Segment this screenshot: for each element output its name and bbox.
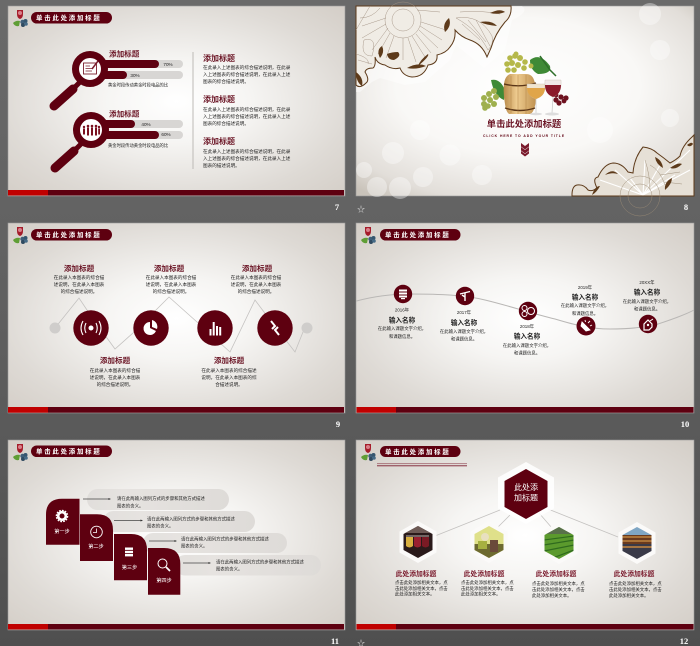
caption 1: 此处添加相关文本。 bbox=[395, 590, 435, 598]
lace ornament: top-left bbox=[356, 2, 524, 92]
node 2018: 在此输入课题文字介绍， bbox=[503, 342, 551, 349]
chevron icon bbox=[521, 143, 529, 156]
caption 3: 此处添加相关文本。 bbox=[532, 592, 572, 599]
node 2018: 2018年 bbox=[520, 323, 535, 330]
text block: bottom 2: 在此录入本图表的综合描述 bbox=[201, 367, 257, 374]
caption 4: 击此处添加相关文本，点击 bbox=[609, 586, 662, 593]
step 3 card: 第三步 bbox=[122, 563, 137, 571]
hexagon photo: green vineyard bbox=[544, 526, 574, 559]
node 20XX: 20XX年 bbox=[639, 279, 655, 286]
text block: top 2: 在此录入本图表的综合描 bbox=[146, 274, 197, 281]
text block: bottom 1: 述说明，在此录入本图表 bbox=[90, 374, 141, 381]
slide 9 header bbox=[13, 227, 112, 244]
wine barrel and grapes bbox=[481, 52, 569, 116]
caption 4 bbox=[609, 569, 662, 599]
page number 11: 11 bbox=[331, 636, 339, 646]
magnifier 2 with progress bars: 40% bbox=[141, 122, 151, 127]
text block: bottom 2: 合描述说明。 bbox=[215, 381, 243, 388]
node 2019: 输入名称 bbox=[572, 292, 599, 302]
slide 11: four steps bbox=[8, 440, 345, 646]
text block: top 2: 添加标题 bbox=[154, 263, 185, 273]
text block 1: 入上述图表的综合描述说明，在此录入上述 bbox=[203, 71, 291, 78]
text block: top 3: 述说明，在此录入本图表 bbox=[231, 281, 282, 288]
step row 4 text pill: 图表的含义。 bbox=[216, 566, 242, 572]
caption 2: 此处添加标题 bbox=[464, 569, 505, 578]
node 2017: 和课题信息。 bbox=[451, 336, 477, 342]
text block: bottom 2: 说明，在此录入本图表的综 bbox=[201, 374, 257, 381]
caption 2 bbox=[461, 569, 514, 598]
step row 2 text pill: 请在此两输入图列方式的步骤和其他方式描述 bbox=[147, 516, 235, 522]
circle icon: pie bbox=[133, 310, 169, 346]
step row 3 text pill: 请在此两输入图列方式的步骤和其他方式描述 bbox=[181, 536, 269, 542]
step 2 card bbox=[80, 514, 113, 561]
slide 10 header: 单击此处添加标题 bbox=[385, 230, 451, 239]
slide 7: magnifier statistics bbox=[8, 6, 345, 212]
caption 3: 此处添加标题 bbox=[536, 569, 577, 578]
node 20XX: 在此输入课题文字介绍， bbox=[623, 298, 671, 305]
text block 3: 在此录入上述图表的综合描述说明，在此录 bbox=[203, 148, 291, 155]
slide 10 background bbox=[356, 223, 694, 413]
text block 1: 在此录入上述图表的综合描述说明，在此录 bbox=[203, 64, 291, 71]
caption 1 bbox=[395, 569, 448, 598]
caption 4: 此处添加相关文本。 bbox=[609, 592, 649, 599]
slide 8 background bbox=[356, 6, 694, 196]
text block 1 bbox=[203, 53, 291, 85]
step row 3 text pill: 图表的含义。 bbox=[181, 542, 207, 550]
node 2016: 和课题信息。 bbox=[389, 333, 415, 340]
page number 8: 8 bbox=[684, 202, 688, 212]
text block: top 1: 的综合描述说明。 bbox=[61, 288, 97, 295]
page number 7: 7 bbox=[335, 202, 340, 212]
slide 12 header: 单击此处添加标题 bbox=[385, 447, 451, 456]
step 1 card: 第一步 bbox=[54, 527, 70, 535]
page number 9: 9 bbox=[336, 419, 340, 429]
slide 7 background bbox=[8, 6, 345, 196]
hexagon photo: wine glasses bbox=[400, 521, 436, 563]
end dots bbox=[50, 322, 312, 334]
magnifier 1 with progress bars bbox=[54, 48, 183, 106]
text block: top 3: 在此录入本图表的综合描 bbox=[231, 274, 282, 281]
slide 9 background bbox=[8, 223, 345, 413]
text block 1: 图表的综合描述说明。 bbox=[203, 78, 249, 85]
magnifier 2 with progress bars: 添加标题 bbox=[109, 108, 140, 118]
zigzag line bbox=[55, 297, 307, 352]
node 2018 bbox=[503, 302, 551, 356]
text block: top 1: 述说明，在此录入本图表 bbox=[54, 281, 105, 288]
text block 2: 图表的综合描述说明。 bbox=[203, 120, 249, 127]
text block 2 bbox=[203, 94, 291, 127]
star icon: ☆ bbox=[357, 205, 365, 214]
step 4 card: 第四步 bbox=[156, 576, 172, 584]
node 2016: 2016年 bbox=[395, 306, 410, 314]
node 2018: 和课题信息。 bbox=[514, 350, 540, 356]
slide 7 header bbox=[13, 10, 112, 27]
slide 11 header: 单击此处添加标题 bbox=[36, 446, 102, 456]
page number 12: 12 bbox=[680, 636, 688, 646]
text block: bottom 2 bbox=[201, 355, 257, 388]
central hexagon: 此处添 bbox=[514, 482, 538, 492]
text block: bottom 1: 在此录入本图表的综合描 bbox=[90, 367, 141, 374]
caption 4: 此处添加标题 bbox=[614, 569, 655, 578]
timeline curve bbox=[356, 294, 694, 329]
node 20XX bbox=[623, 279, 671, 333]
hexagon photo: chateau bbox=[618, 522, 656, 564]
slide 12: hexagon hierarchy bbox=[356, 440, 694, 646]
caption 3: 击此处添加相关文本，点击 bbox=[532, 586, 585, 593]
bokeh lights bbox=[356, 3, 679, 199]
text block: top 1: 在此录入本图表的综合描 bbox=[54, 274, 105, 281]
step 3 card bbox=[114, 534, 147, 580]
magnifier 1 with progress bars: 70% bbox=[163, 62, 173, 67]
caption 2: 点击此处添加相关文本，点 bbox=[461, 579, 514, 586]
caption 1: 点击此处添加相关文本，点 bbox=[395, 579, 448, 586]
text block: top 3 bbox=[231, 263, 282, 295]
step row 4 text pill: 请在此两输入图列方式的步骤和其他方式描述 bbox=[216, 558, 304, 566]
divider bbox=[192, 52, 194, 169]
text block: top 3: 添加标题 bbox=[242, 263, 273, 273]
text block: bottom 2: 添加标题 bbox=[214, 355, 245, 365]
caption 1: 击此处添加相关文本，点击 bbox=[395, 585, 448, 592]
magnifier 1 with progress bars: 黄金时段传动黄金时段电品的比 bbox=[108, 82, 169, 88]
node 2017 bbox=[440, 287, 488, 342]
text block 2: 在此录入上述图表的综合描述说明，在此录 bbox=[203, 106, 291, 113]
caption 3 bbox=[532, 569, 585, 599]
text block: top 2: 的综合描述说明。 bbox=[153, 288, 189, 295]
step 1 card bbox=[46, 499, 80, 545]
step row 1 text pill bbox=[83, 489, 229, 510]
node 2016: 输入名称 bbox=[389, 316, 416, 324]
double rule under header bbox=[377, 464, 467, 466]
circle icon: bars bbox=[197, 310, 233, 346]
text block: top 1: 添加标题 bbox=[64, 263, 95, 273]
slide 9: zigzag four icons bbox=[8, 223, 345, 429]
node 2017: 输入名称 bbox=[451, 318, 478, 327]
step 2 card: 第二步 bbox=[88, 542, 104, 550]
caption 4: 点击此处添加相关文本，点 bbox=[609, 580, 662, 587]
text block: top 3: 的综合描述说明。 bbox=[238, 288, 274, 295]
text block: bottom 1: 添加标题 bbox=[100, 355, 131, 365]
caption 3: 点击此处添加相关文本，点 bbox=[532, 580, 585, 587]
node 2017: 2017年 bbox=[457, 309, 472, 316]
step row 4 text pill bbox=[175, 555, 321, 576]
text block 3: 入上述图表的综合描述说明，在此录入上述 bbox=[203, 155, 291, 162]
node 2016 bbox=[378, 285, 426, 340]
node 20XX: 输入名称 bbox=[634, 288, 661, 296]
node 2017: 在此输入课题文字介绍， bbox=[440, 328, 488, 335]
step row 2 text pill bbox=[103, 511, 255, 532]
text block: bottom 1: 的综合描述说明。 bbox=[97, 381, 133, 388]
cover subtitle: CLICK HERE TO ADD YOUR TITLE bbox=[483, 134, 565, 138]
text block 3: 添加标题 bbox=[203, 136, 235, 146]
slide 10 header bbox=[361, 227, 460, 244]
text block 2: 添加标题 bbox=[203, 94, 235, 104]
hexagon photo: vineyard harvest bbox=[474, 526, 504, 558]
node 2019: 在此输入课题文字介绍， bbox=[561, 302, 609, 309]
slide 9 header: 单击此处添加标题 bbox=[36, 230, 102, 239]
step row 1 text pill: 图表的含义。 bbox=[117, 502, 143, 510]
node 2016: 在此输入课题文字介绍， bbox=[378, 325, 426, 332]
text block: top 2 bbox=[146, 263, 197, 295]
node 2018: 输入名称 bbox=[514, 332, 541, 340]
magnifier 2 with progress bars: 黄金时段传动黄金时段电品的比 bbox=[108, 142, 169, 149]
lace ornament: bottom-right bbox=[572, 135, 694, 216]
magnifier 1 with progress bars: 30% bbox=[130, 73, 140, 78]
slide 11 background bbox=[8, 440, 345, 630]
step 4 card bbox=[148, 548, 180, 595]
step row 2 text pill: 图表的含义。 bbox=[147, 522, 173, 530]
slide 7 header: 单击此处添加标题 bbox=[36, 13, 102, 22]
slide 12 background bbox=[356, 440, 694, 630]
slide 8: section cover bbox=[356, 2, 694, 216]
magnifier 2 with progress bars: 60% bbox=[161, 132, 171, 137]
text block: bottom 1 bbox=[90, 355, 141, 388]
circle icon: link bbox=[257, 310, 293, 346]
cover title: 单击此处添加标题 bbox=[487, 118, 562, 129]
magnifier 1 with progress bars: 添加标题 bbox=[109, 48, 140, 58]
slide 11 header bbox=[13, 444, 112, 461]
caption 2: 击此处添加相关文本，点击 bbox=[461, 585, 514, 592]
circle icon: signal bbox=[73, 310, 109, 346]
text block 3: 图表的描述说明。 bbox=[203, 162, 240, 169]
page number 10: 10 bbox=[681, 419, 689, 429]
caption 1: 此处添加标题 bbox=[396, 569, 437, 578]
central hexagon bbox=[498, 462, 554, 524]
text block 3 bbox=[203, 136, 291, 169]
node 2019: 和课题信息。 bbox=[572, 310, 598, 317]
slide 10: timeline bbox=[356, 223, 694, 429]
caption 2: 此处添加相关文本。 bbox=[461, 590, 501, 598]
connector lines bbox=[435, 509, 618, 537]
step row 1 text pill: 请在此两输入图列方式的步骤和其他方式描述 bbox=[117, 495, 205, 502]
node 2019: 2019年 bbox=[578, 284, 593, 291]
step row 3 text pill bbox=[143, 533, 287, 553]
text block 1: 添加标题 bbox=[203, 53, 235, 63]
text block: top 1 bbox=[54, 263, 105, 295]
slide 12 header bbox=[361, 444, 460, 461]
magnifier 2 with progress bars bbox=[55, 108, 183, 168]
node 20XX: 和课题信息。 bbox=[634, 306, 660, 312]
text block: top 2: 述说明，在此录入本图表 bbox=[146, 281, 197, 288]
central hexagon: 加标题 bbox=[514, 492, 538, 502]
node 2019 bbox=[561, 284, 609, 336]
text block 2: 入上述图表的综合描述说明，在此录入上述 bbox=[203, 113, 291, 120]
